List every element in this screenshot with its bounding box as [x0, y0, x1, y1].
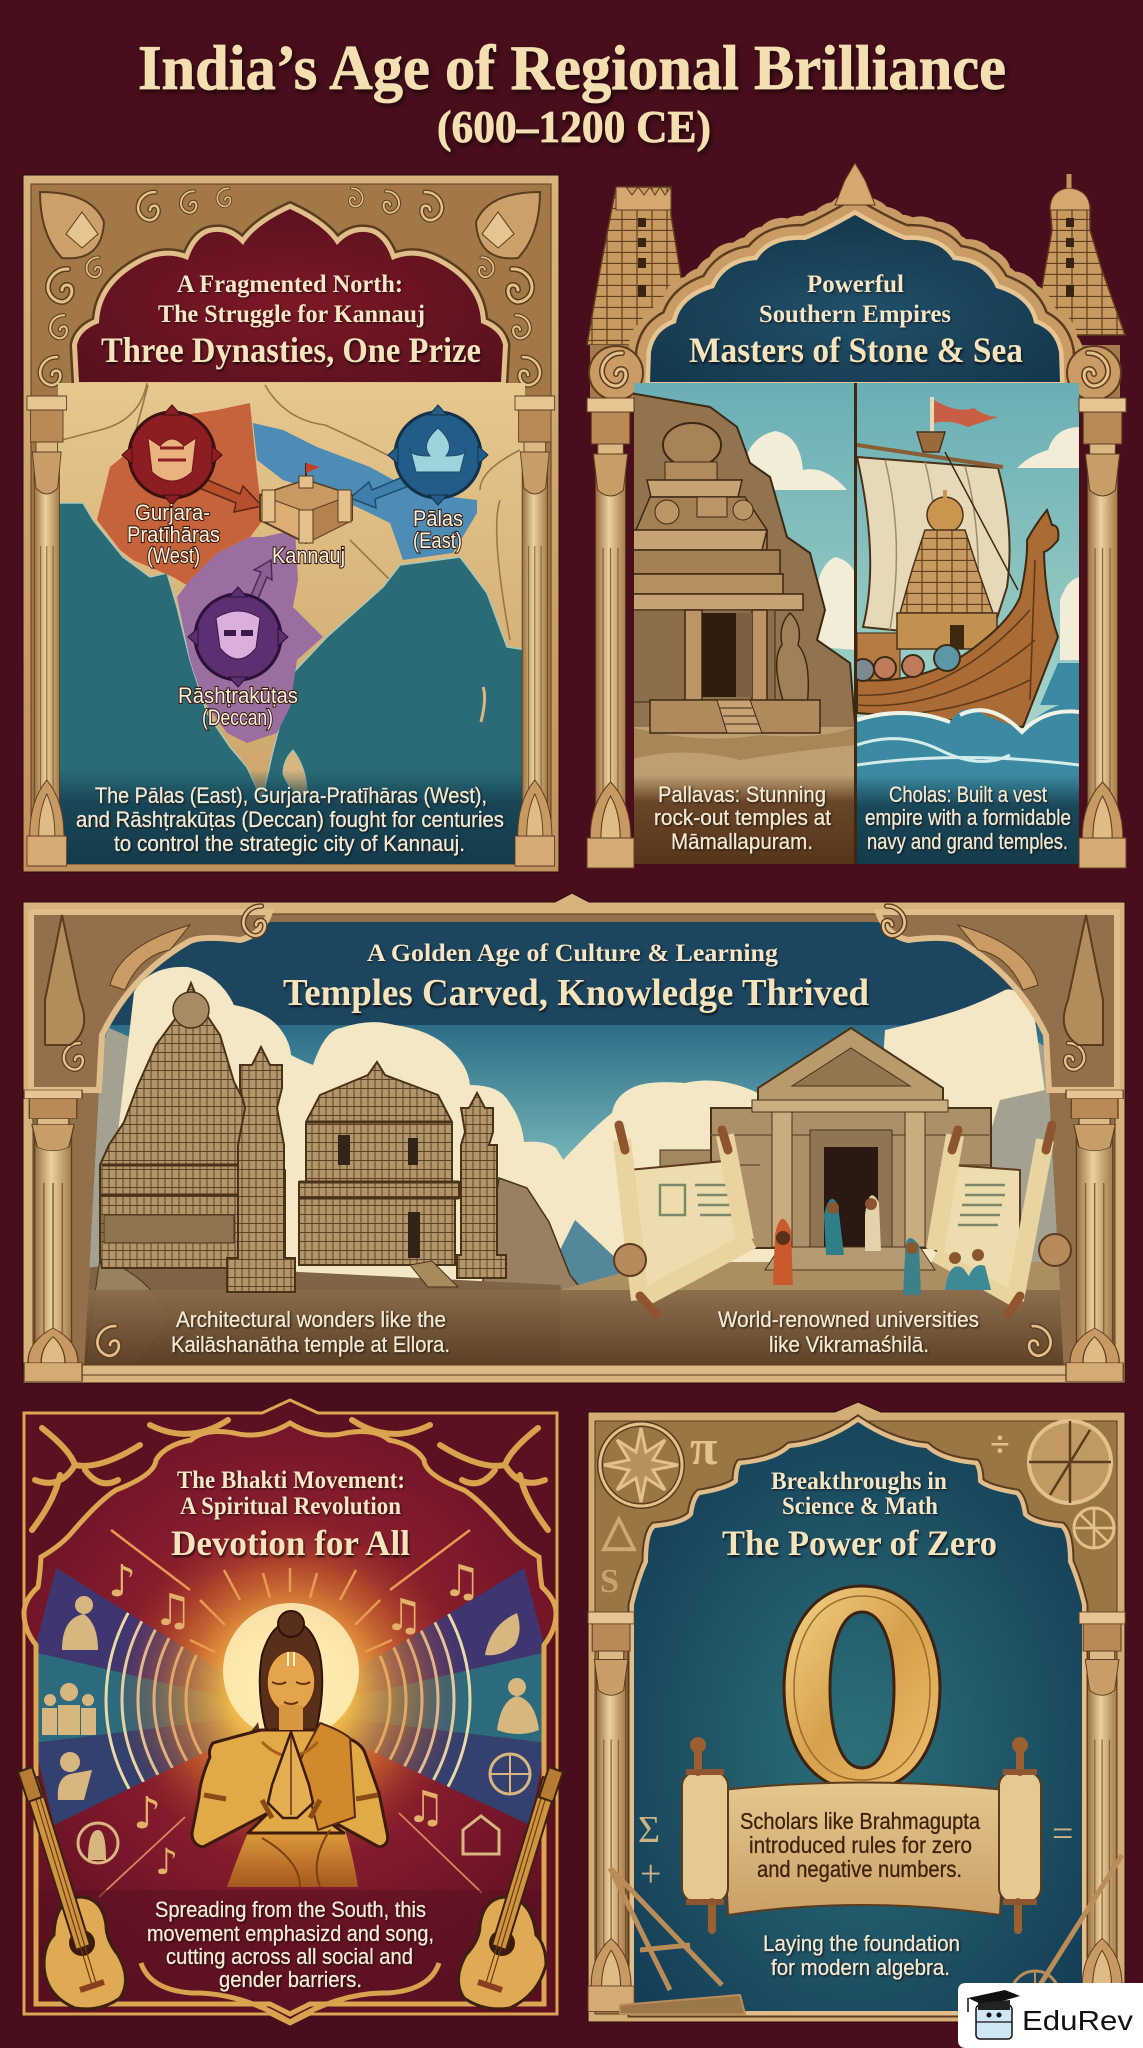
map labels: Rāshṭrakūṭas	[178, 683, 298, 708]
icon: Gurjara-Pratihara emblem	[122, 405, 222, 505]
math symbols: Σ	[638, 1809, 660, 1851]
right pillar	[1079, 398, 1126, 868]
bottom flourish	[141, 1963, 439, 2022]
arrows to Kannauj	[199, 476, 409, 601]
icon: pen and wheel	[1011, 1855, 1122, 2019]
scene: Pallava rock-cut temple	[630, 383, 856, 864]
carved frame ornament	[40, 188, 540, 385]
title: India’s Age of Regional Brilliance	[138, 33, 1006, 103]
caption	[147, 1897, 434, 1992]
music notes: ♫	[406, 1782, 445, 1833]
heading: Science & Math	[782, 1493, 938, 1520]
icon: sun dial	[600, 1424, 682, 1506]
scene: Chola ship	[852, 383, 1082, 864]
caption: and Rāshṭrakūṭas (Deccan) fought for centuries	[76, 807, 504, 832]
panel: southern empires	[587, 163, 1126, 868]
math symbols on frame: ÷	[990, 1424, 1010, 1464]
heading: Masters of Stone & Sea	[689, 330, 1023, 370]
heading: The Bhakti Movement:	[177, 1467, 405, 1494]
left pillar	[587, 398, 634, 868]
captions: rock-out temples at	[654, 805, 831, 830]
bottom band	[33, 1365, 1115, 1375]
Kailashanatha temple	[100, 983, 506, 1292]
heading	[722, 1468, 997, 1563]
music notes: ♫	[442, 1556, 481, 1607]
scroll text: introduced rules for zero	[749, 1832, 972, 1858]
math symbols on frame: π	[690, 1419, 717, 1475]
flourishes	[32, 1420, 548, 1530]
caption: The Pālas (East), Gurjara-Pratīhāras (West),	[95, 783, 487, 808]
golden zero	[784, 1586, 940, 1790]
heading: A Golden Age of Culture & Learning	[367, 940, 779, 967]
EduRev logo: EduRev	[1022, 2005, 1133, 2036]
panel: golden age of culture and learning	[23, 893, 1125, 1383]
devotional background	[26, 1426, 554, 1944]
caption	[763, 1931, 960, 1980]
math symbols on frame: S	[600, 1563, 619, 1600]
heading: Powerful	[807, 271, 904, 298]
university building	[660, 1028, 991, 1270]
map labels: Kannauj	[272, 543, 345, 568]
map labels: Gurjara-	[135, 500, 210, 525]
heading: Three Dynasties, One Prize	[101, 330, 481, 370]
captions: Architectural wonders like the	[176, 1307, 446, 1332]
parchment scroll	[682, 1737, 1041, 1930]
music notes: ♫	[153, 1585, 192, 1636]
heading	[101, 271, 481, 370]
music notes: ♫	[384, 1590, 423, 1641]
heading: A Fragmented North:	[177, 271, 403, 298]
caption: to control the strategic city of Kannauj.	[114, 831, 465, 856]
left pillar	[588, 1612, 634, 2012]
captions: Kailāshanātha temple at Ellora.	[171, 1332, 450, 1357]
heading: The Struggle for Kannauj	[158, 301, 425, 328]
scroll text	[740, 1808, 980, 1882]
caption	[76, 783, 504, 856]
icon: compass dial	[1029, 1421, 1114, 1548]
scroll text: and negative numbers.	[757, 1856, 962, 1882]
captions	[654, 782, 1071, 854]
caption: gender barriers.	[219, 1967, 362, 1992]
music notes: ♪	[133, 1788, 161, 1839]
ornate arch	[589, 163, 1121, 400]
captions: navy and grand temples.	[867, 829, 1068, 854]
map labels	[127, 500, 463, 730]
caption: for modern algebra.	[771, 1955, 950, 1980]
scene divider	[854, 383, 857, 864]
captions: Pallavas: Stunning	[658, 782, 826, 807]
title: (600–1200 CE)	[437, 101, 711, 152]
left pillar	[27, 396, 67, 866]
right pillar	[515, 396, 555, 866]
heading	[171, 1467, 410, 1563]
heading: The Power of Zero	[722, 1523, 997, 1563]
icon: Pala emblem	[388, 405, 488, 505]
captions: Cholas: Built a vest	[889, 782, 1047, 807]
scroll text: Scholars like Brahmagupta	[740, 1808, 980, 1834]
title	[138, 33, 1006, 152]
captions	[171, 1307, 979, 1357]
right pillar	[1066, 1090, 1123, 1381]
icon: saint figure	[192, 1603, 388, 1887]
icon: graduation monitor	[968, 1990, 1020, 2039]
map labels: Pratīhāras	[127, 522, 220, 547]
panel: science and math	[588, 1402, 1125, 2022]
music notes: ♪	[108, 1556, 136, 1607]
heading: A Spiritual Revolution	[180, 1493, 401, 1520]
math symbols on frame	[600, 1419, 1010, 1600]
caption: cutting across all social and	[166, 1944, 413, 1969]
right pillar	[1079, 1612, 1125, 2012]
map labels: (West)	[147, 543, 200, 568]
icon: left guitar	[18, 1767, 126, 2009]
map labels: Pālas	[413, 506, 463, 531]
icons: devotees	[42, 1596, 539, 1863]
map labels: (Deccan)	[202, 705, 273, 730]
scene	[84, 920, 1064, 1372]
captions: Māmallapuram.	[671, 829, 813, 854]
heading: Temples Carved, Knowledge Thrived	[283, 972, 869, 1014]
music notes: ♪	[155, 1842, 178, 1883]
icon: geometry compass	[610, 1868, 745, 2014]
heading: Southern Empires	[759, 301, 951, 328]
caption: Laying the foundation	[763, 1931, 960, 1956]
map of India	[53, 383, 527, 870]
caption: Spreading from the South, this	[155, 1897, 426, 1922]
scholars	[773, 1195, 991, 1295]
panel: bhakti movement	[18, 1400, 563, 2024]
icon: right guitar	[458, 1767, 563, 2009]
right gopuram tower	[1034, 174, 1125, 335]
panel: a fragmented north	[23, 175, 559, 872]
math symbols: +	[640, 1853, 661, 1895]
map labels: (East)	[413, 528, 462, 553]
left gopuram tower	[587, 187, 690, 345]
scroll: left	[614, 1125, 752, 1314]
heading	[283, 940, 869, 1014]
math symbols	[638, 1809, 1073, 1895]
carved corners	[31, 906, 1117, 1090]
captions: World-renowned universities	[718, 1307, 979, 1332]
math symbols on frame: △	[601, 1506, 637, 1555]
math symbols: =	[1052, 1813, 1073, 1855]
caption: movement emphasizd and song,	[147, 1921, 434, 1946]
captions: empire with a formidable	[865, 805, 1071, 830]
scroll: right	[935, 1125, 1071, 1314]
captions: like Vikramaśhilā.	[769, 1332, 929, 1357]
heading: Breakthroughs in	[771, 1468, 947, 1495]
icon: Rashtrakuta emblem	[188, 587, 288, 687]
music notes	[108, 1556, 481, 1883]
left pillar	[24, 1090, 82, 1381]
icon: Kannauj fortress	[260, 463, 352, 543]
heading: Devotion for All	[171, 1523, 410, 1563]
EduRev logo	[958, 1983, 1143, 2048]
heading	[689, 271, 1023, 370]
